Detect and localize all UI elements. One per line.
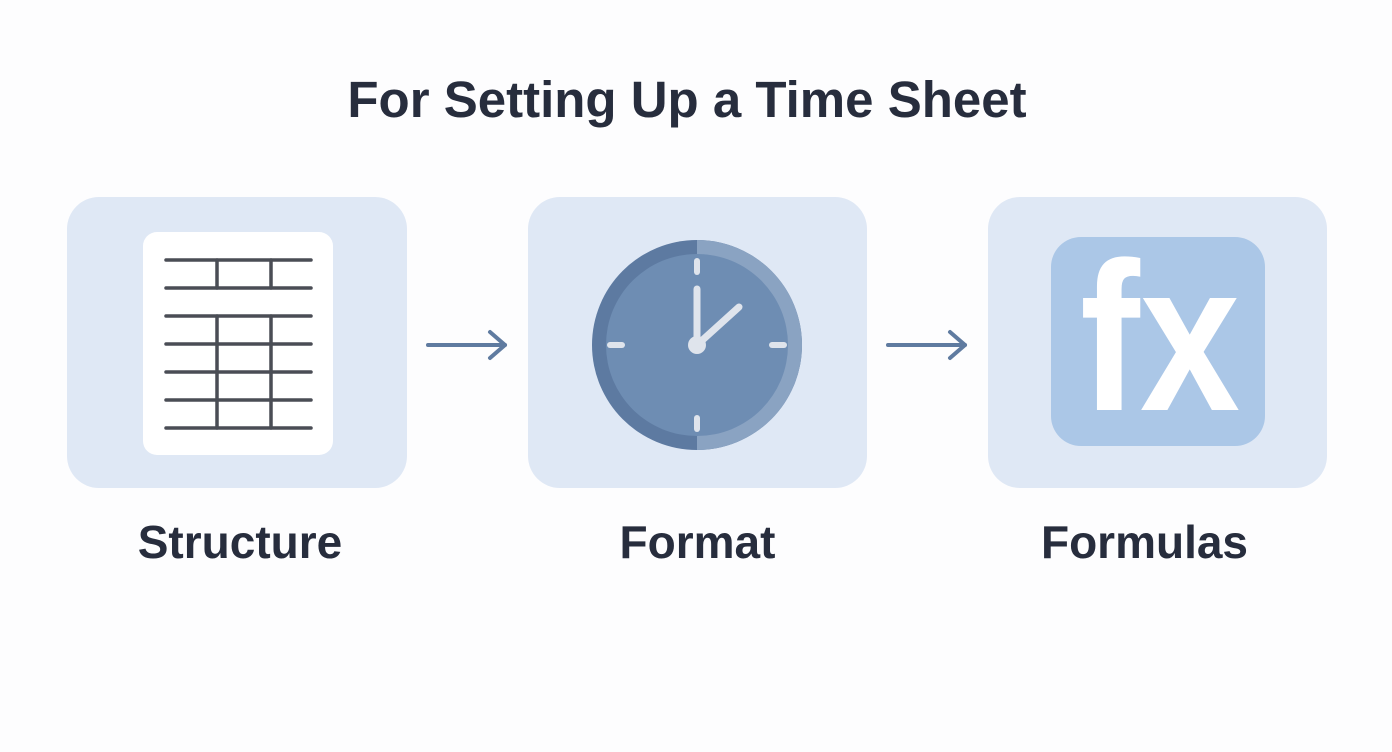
icon: fx: fx: [1080, 218, 1240, 455]
panel: structure: [67, 197, 407, 488]
arrow 2: [888, 332, 965, 358]
panel: format: [528, 197, 867, 488]
label: structure: Structure: [138, 516, 342, 568]
arrow 1: [428, 332, 505, 358]
label: format: Format: [620, 516, 775, 568]
icon: table: [143, 232, 333, 455]
title: For Setting Up a Time Sheet: [347, 71, 1027, 128]
label: formulas: Formulas: [1041, 516, 1248, 568]
icon: clock: [592, 240, 802, 450]
panel: formulas: [988, 197, 1327, 488]
